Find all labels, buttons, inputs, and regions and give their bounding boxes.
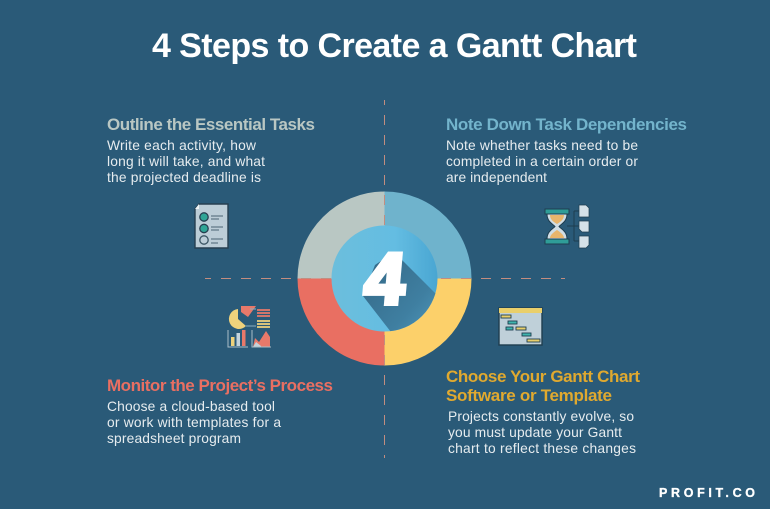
heading: monitor: Monitor the Project’s Process: [107, 376, 333, 395]
logo: PROFIT.CO: [659, 486, 755, 500]
text block: monitor: Choose a cloud-based tool: [107, 399, 275, 414]
icon: gantt chart sheet: [499, 308, 542, 345]
icon: hourglass with tasks: [545, 205, 589, 248]
text block: choose software: Projects constantly evolve, so: [448, 409, 634, 424]
title: 4 Steps to Create a Gantt Chart: [152, 27, 637, 65]
text block: outline: [107, 138, 265, 185]
text block: monitor: spreadsheet program: [107, 431, 241, 446]
icon: checklist document: [195, 204, 228, 248]
panel: note down task dependencies: [446, 115, 687, 185]
donut chart: [205, 100, 565, 458]
heading: dependencies: Note Down Task Dependencies: [446, 115, 687, 134]
panel: monitor the project's process: [107, 376, 333, 446]
text block: choose software: chart to reflect these changes: [448, 441, 636, 456]
heading: outline: Outline the Essential Tasks: [107, 115, 315, 134]
text block: outline: the projected deadline is: [107, 170, 261, 185]
heading: choose software: Choose Your Gantt Chart: [446, 367, 640, 386]
heading: choose software: Software or Template: [446, 386, 612, 405]
text block: outline: Write each activity, how: [107, 138, 256, 153]
number 4: 4: [361, 240, 408, 319]
text block: monitor: or work with templates for a: [107, 415, 281, 430]
text block: monitor: [107, 399, 281, 446]
heading: choose software: [446, 367, 640, 405]
text block: dependencies: [446, 138, 638, 185]
text block: dependencies: completed in a certain order or: [446, 154, 638, 169]
icon: charts and data: [228, 306, 271, 347]
panel: choose your gantt chart software: [446, 367, 640, 456]
text block: outline: long it will take, and what: [107, 154, 265, 169]
text block: dependencies: are independent: [446, 170, 547, 185]
text block: dependencies: Note whether tasks need to be: [446, 138, 638, 153]
infographic: [107, 32, 755, 498]
text block: choose software: you must update your Gantt: [448, 425, 622, 440]
panel: outline the essential tasks: [107, 115, 315, 185]
text block: choose software: [448, 409, 636, 456]
